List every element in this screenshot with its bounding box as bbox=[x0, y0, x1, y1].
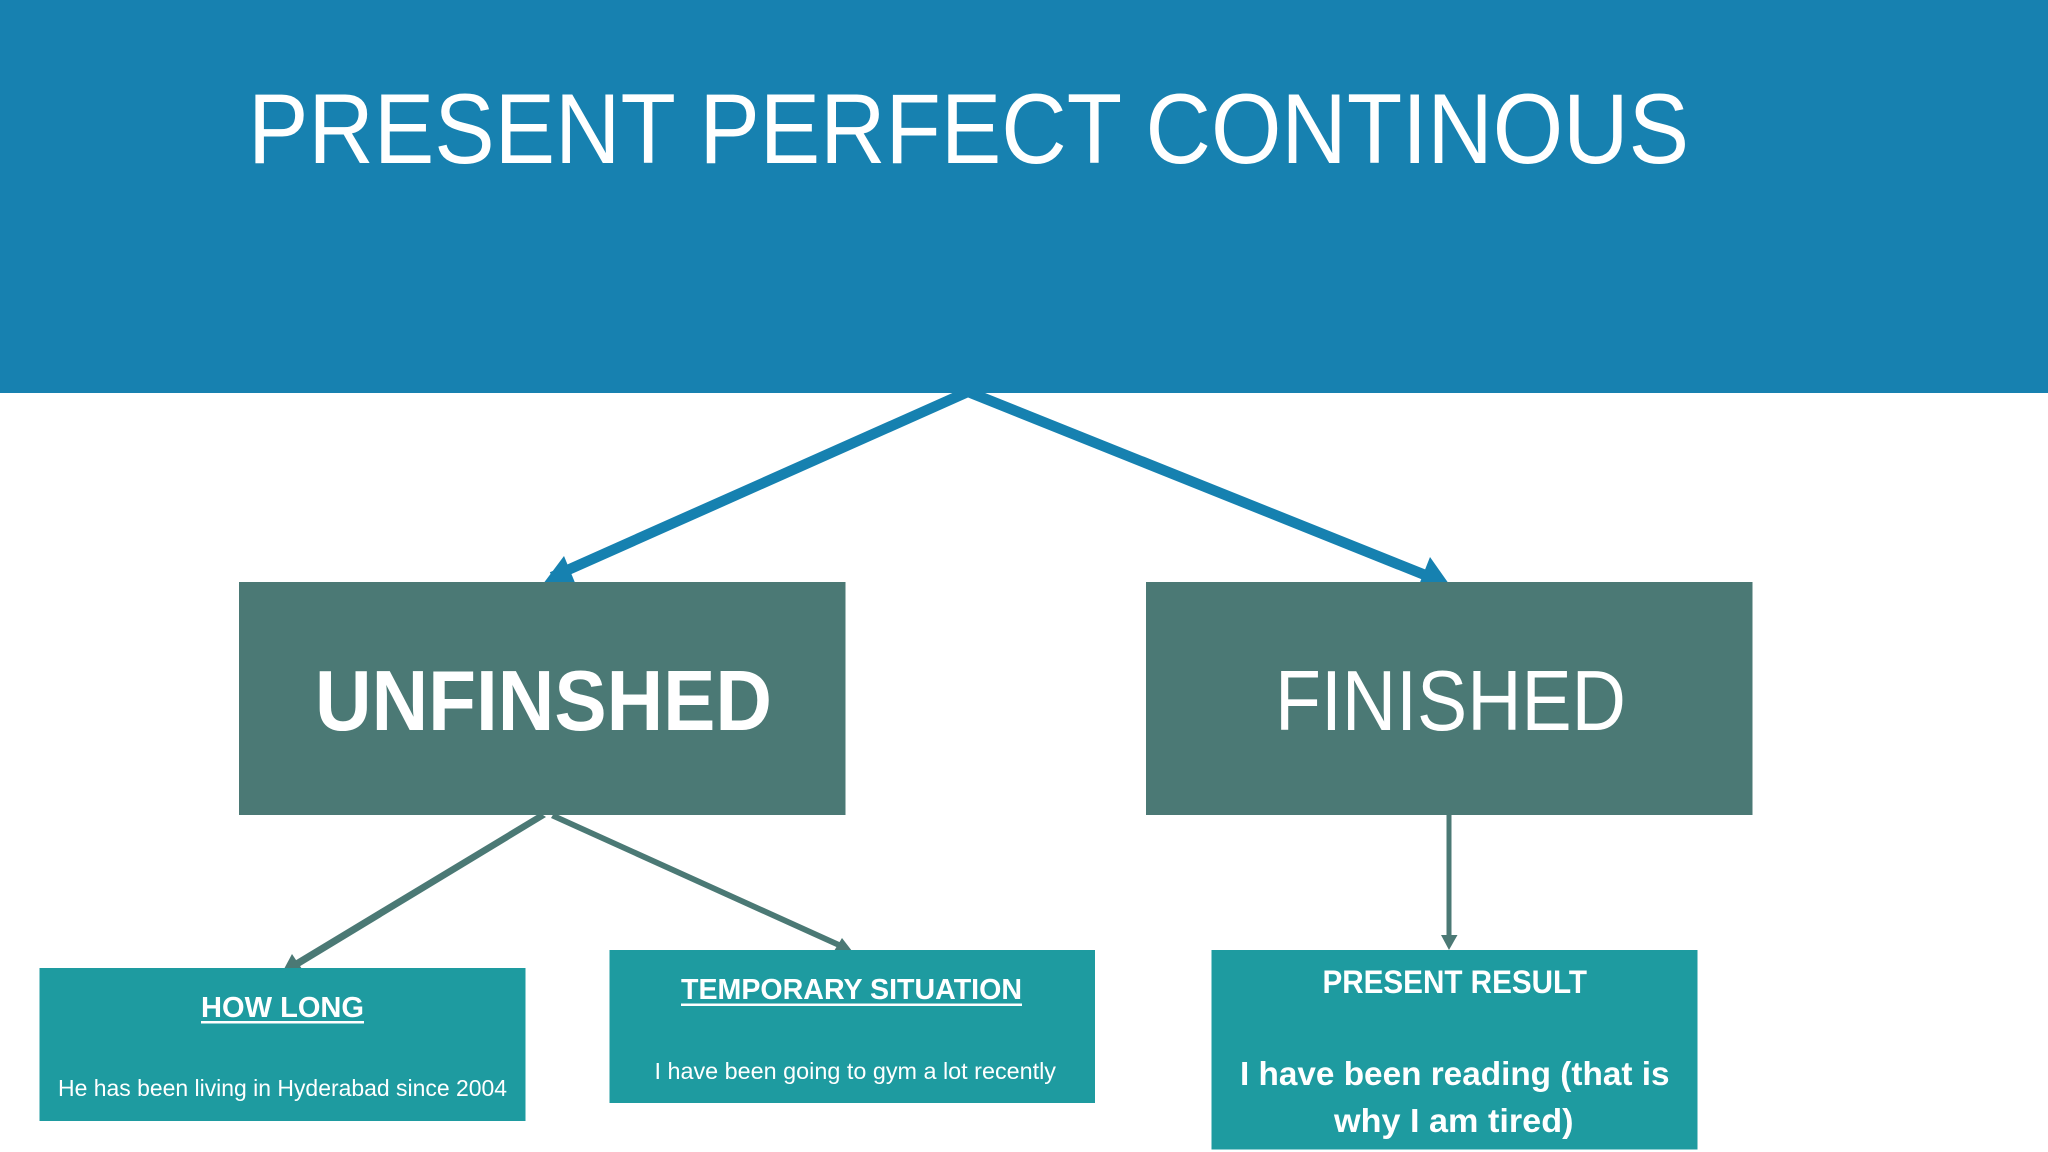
arrow: header to unfinished bbox=[543, 382, 990, 590]
panel: temporary situation bbox=[610, 950, 1095, 1103]
panel: how long bbox=[40, 968, 526, 1121]
example: present result: I have been reading (that is bbox=[1240, 1055, 1670, 1092]
title: PRESENT PERFECT CONTINOUS bbox=[248, 73, 1689, 184]
heading: finished: FINISHED bbox=[1275, 654, 1626, 749]
arrow: finished to present result bbox=[1441, 814, 1458, 950]
heading: how long: HOW LONG bbox=[201, 992, 364, 1024]
heading: temporary situation: TEMPORARY SITUATION bbox=[681, 974, 1022, 1006]
heading: unfinished: UNFINSHED bbox=[315, 654, 772, 749]
arrow: unfinished to how long bbox=[284, 813, 546, 969]
arrow: header to finished bbox=[946, 383, 1449, 590]
panel: unfinished bbox=[239, 582, 846, 815]
example: present result bbox=[1240, 1055, 1670, 1139]
example: how long: He has been living in Hyderabad since 2004 bbox=[58, 1075, 507, 1101]
heading: present result: PRESENT RESULT bbox=[1322, 964, 1587, 1000]
panel: present result bbox=[1212, 950, 1698, 1150]
arrow: unfinished to temporary situation bbox=[551, 813, 852, 951]
example: temporary situation: I have been going to gym a lot recently bbox=[654, 1058, 1057, 1084]
example: present result: why I am tired) bbox=[1333, 1102, 1574, 1139]
panel: finished bbox=[1146, 582, 1752, 815]
